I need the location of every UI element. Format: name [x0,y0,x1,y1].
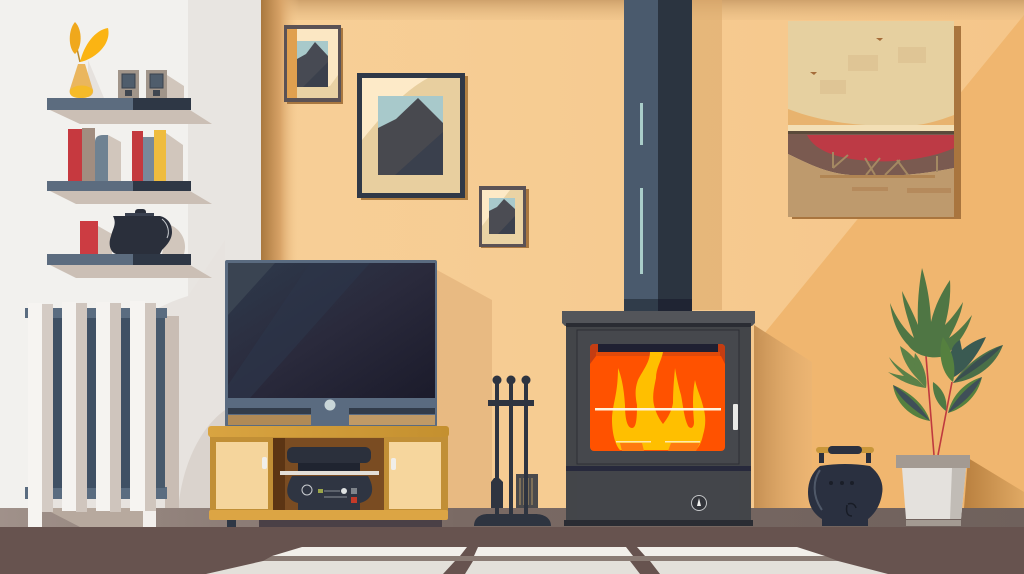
plant lower leaves [893,377,982,421]
stove dial [692,496,706,510]
television [225,260,437,427]
icon: black teapot [110,209,172,254]
tv screen [228,263,435,398]
flames [612,352,705,450]
plant top fan leaves [890,268,972,357]
tv power button [324,400,336,410]
wall frame small right [479,186,529,248]
stove top plate [562,311,755,326]
chimney shadow [692,0,722,310]
tv lower cut-outs [228,408,435,425]
pot [896,455,970,526]
radiator pipes [25,308,167,499]
icon: vase with leaves [70,22,109,98]
stove body [566,323,751,523]
stove ash drawer [577,471,739,523]
cabinet open compartment [273,438,384,510]
books left [68,128,108,181]
icon: small clocks [118,70,184,98]
grate lines [595,408,721,410]
stove door [577,330,739,464]
baseboard [0,508,1024,528]
radiator fins [28,301,156,527]
shelf 3 with tea kettle [47,209,212,278]
wall frame large center [357,73,468,200]
tv shadow on wall [437,270,492,508]
cabinet legs [227,519,236,527]
wall frame small left [284,25,343,104]
stove handle [733,404,738,430]
wood stove [562,311,755,526]
floor [0,527,1024,574]
plant right leaves [940,337,1003,383]
red tin [80,221,98,254]
black pot with handle [808,446,882,526]
orange wall [261,0,1024,510]
white wall [0,0,262,510]
shelf 1 with vase and clocks [47,22,212,124]
potted plant [888,268,1024,526]
plant stems [926,356,952,455]
radiator shadow [165,316,179,508]
plant shadow [964,458,1024,508]
radiator [25,301,179,527]
floor rug tiles [206,547,888,574]
abstract painting [788,21,961,219]
cabinet base [209,510,448,520]
shelf 2 with books [47,128,212,204]
books right [132,130,166,181]
plant left leaves [888,346,926,388]
chimney flue [624,0,692,311]
cabinet doors [216,442,441,509]
stereo device [280,447,379,510]
stove shadow on wall [754,325,812,508]
stove band [566,466,751,471]
tv cabinet [208,426,449,527]
stove base [564,520,753,526]
stove firebox glass [590,344,725,451]
fireplace tools [474,376,551,526]
